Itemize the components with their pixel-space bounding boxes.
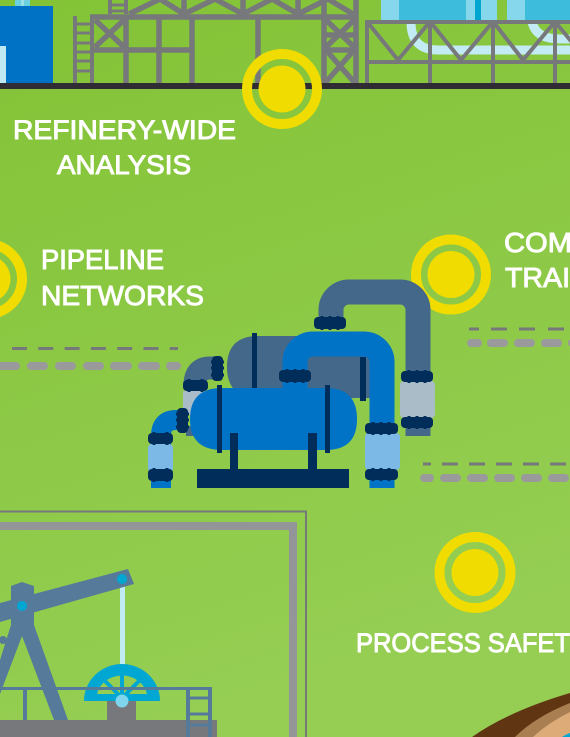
heading: refinery-wide analysis: ANALYSIS [57,150,191,180]
heading: refinery-wide analysis: REFINERY-WIDE [13,115,236,145]
ground line [0,83,570,89]
dashed pipe: right lower [420,464,569,482]
wheel hub [116,694,128,708]
heading: pipeline networks [41,244,204,311]
pump rod [120,586,125,666]
counterweight wheel [84,664,160,701]
marker: pipeline networks [0,244,22,314]
back vessel [227,333,370,401]
heading: refinery-wide analysis [13,115,236,180]
railing and ladder [0,688,212,737]
marker: process safety [440,537,510,608]
heading: pipeline networks: PIPELINE [41,244,164,275]
marker: refinery-wide analysis [247,54,317,124]
pump enclosure frame [0,512,306,737]
oil pumpjack [0,569,217,737]
heading: pipeline networks: NETWORKS [41,280,204,311]
earth cross-section [472,693,570,737]
dashed pipe: right upper [467,329,570,347]
heading: training, cropped at the edge [504,227,570,293]
heading: training, cropped at the edge: TRAI [505,262,570,293]
pivots [17,574,127,611]
dashed pipe: left [0,348,181,370]
front left elbow [148,408,189,488]
front blue pipe [279,344,400,488]
vessel legs and base [197,433,349,488]
central pipework and vessels [148,292,435,488]
pump frame and beam [0,569,134,720]
back left elbow [183,356,224,436]
steel scaffold structure [75,0,570,83]
heading: training, cropped at the edge: COM [504,227,570,258]
back large pipe [314,292,435,436]
pipes behind the bridge truss [381,0,570,50]
marker: training [416,240,486,310]
pedestal and ground [0,701,217,737]
front vessel [190,385,357,453]
building: blue block [0,0,53,83]
